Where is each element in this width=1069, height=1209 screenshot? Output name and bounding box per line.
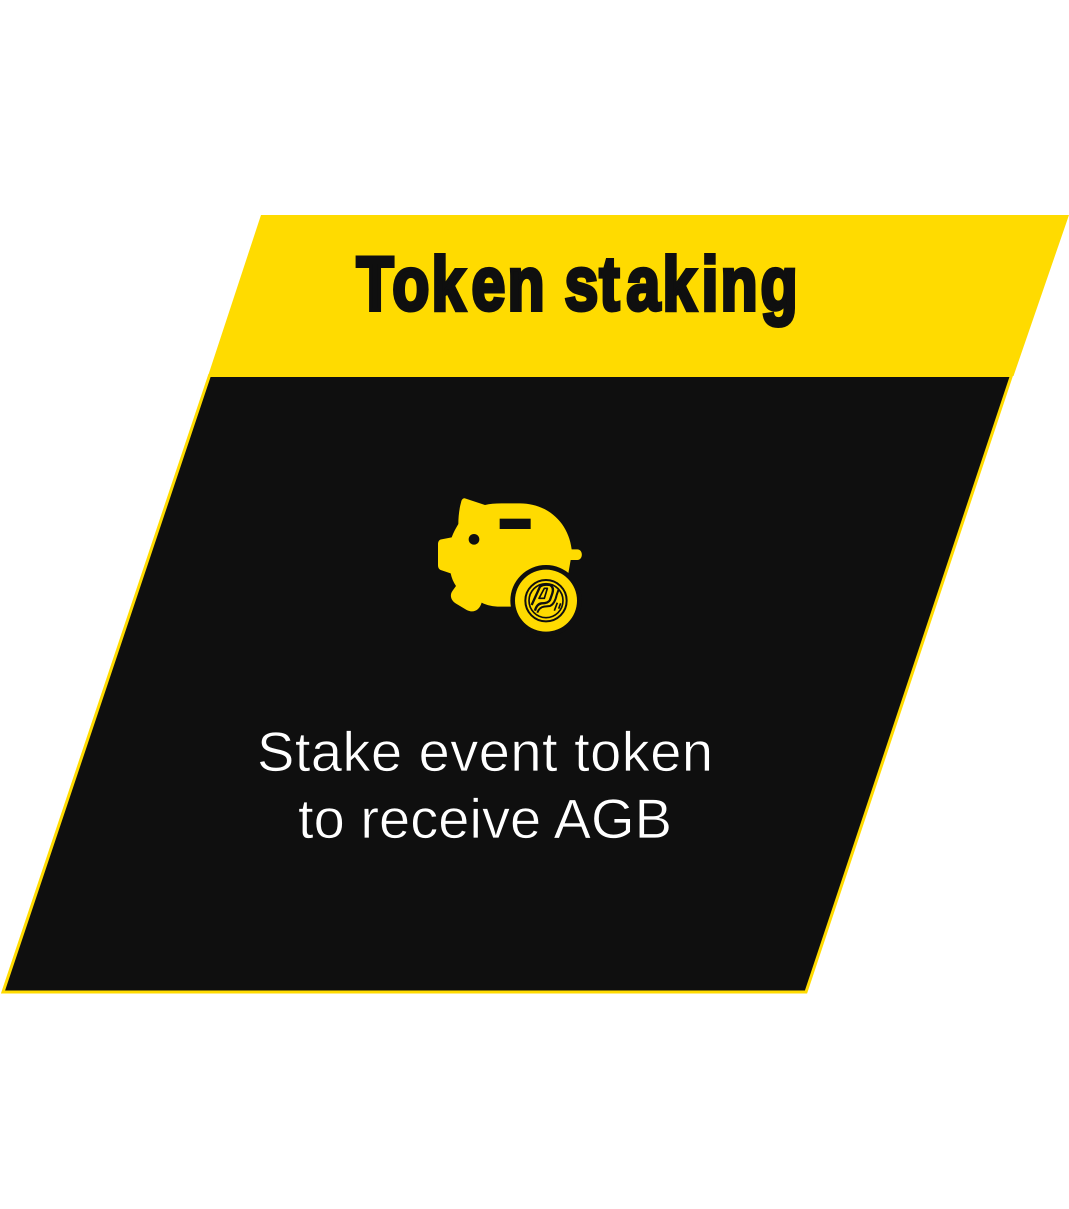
body text [257, 720, 713, 850]
line 2: to receive AGB [298, 787, 672, 850]
heading: Token staking [356, 242, 798, 327]
coin [515, 570, 577, 632]
coin logo [525, 580, 567, 621]
pig eye [469, 534, 479, 545]
coin slot [500, 519, 531, 529]
panel: dark body [3, 376, 1012, 992]
panel: yellow header [208, 215, 1069, 376]
coin cut-out [510, 565, 582, 636]
icon: piggy bank with coin [438, 498, 582, 636]
line 1: Stake event token [257, 720, 713, 783]
pig body [438, 498, 582, 611]
